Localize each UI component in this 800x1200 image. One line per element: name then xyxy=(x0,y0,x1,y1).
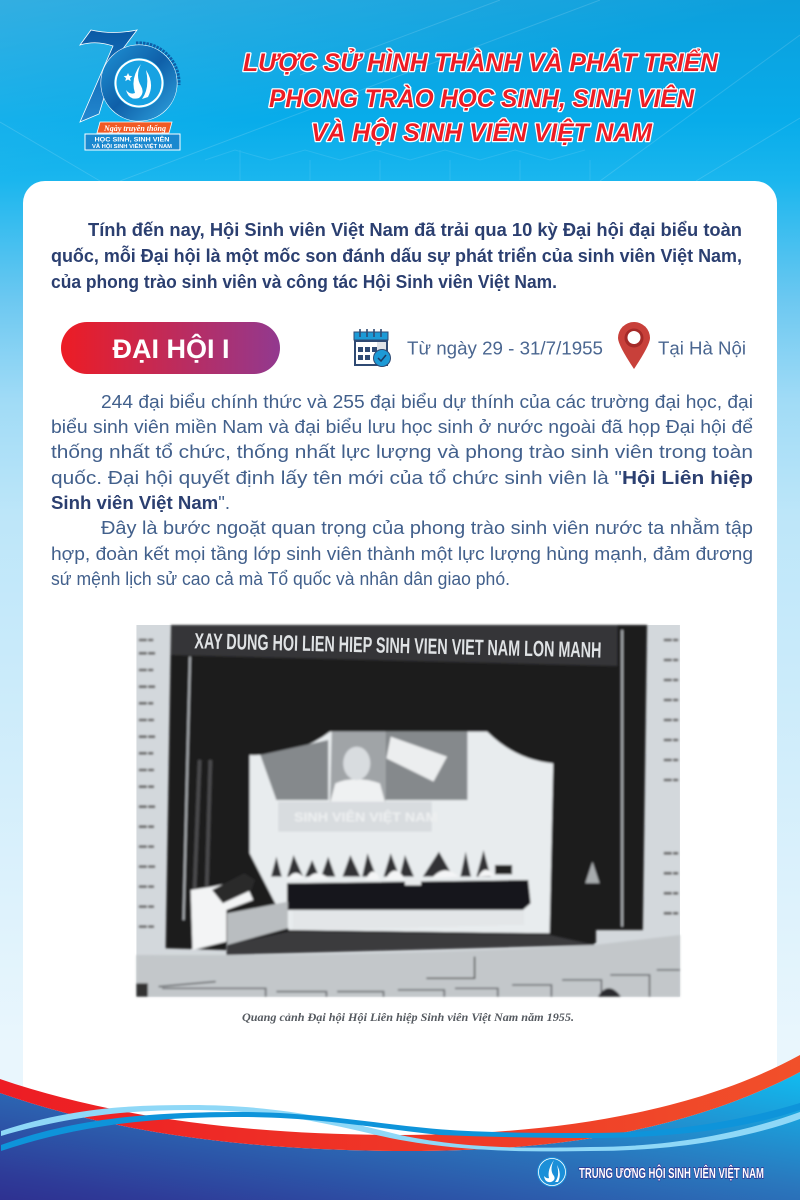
flag card xyxy=(386,737,447,782)
body text xyxy=(51,392,753,589)
logo flame emblem xyxy=(114,58,164,108)
logo: 70 years xyxy=(80,30,180,150)
logo blue ribbon: VÀ HỘI SINH VIÊN VIỆT NAM xyxy=(92,142,172,150)
body text: Đây là bước ngoặt quan trọng của phong trào sinh viên nước ta nhằm tập xyxy=(101,517,753,538)
intro paragraph xyxy=(51,220,742,292)
left side table xyxy=(227,902,288,945)
stage floor xyxy=(226,932,594,955)
stage frame xyxy=(166,625,647,950)
footer waves xyxy=(0,1055,800,1200)
location text: Tại Hà Nội xyxy=(658,338,746,358)
logo blue ribbon xyxy=(85,134,180,150)
logo numeral 7 xyxy=(80,30,137,122)
logo orange ribbon: Ngày truyền thống xyxy=(103,123,167,133)
body text: biểu sinh viên miền Nam và đại biểu lưu học sinh ở nước ngoài đã họp Đại hội để xyxy=(51,417,753,437)
logo blue ribbon: HỌC SINH, SINH VIÊN xyxy=(94,134,170,144)
main table xyxy=(287,880,531,910)
light blue ribbon xyxy=(1,1105,800,1151)
logo date arc xyxy=(136,43,179,85)
body text: thống nhất tổ chức, thống nhất lực lượng và phong trào sinh viên trong toàn xyxy=(51,442,753,462)
intro paragraph: Tính đến nay, Hội Sinh viên Việt Nam đã trải qua 10 kỳ Đại hội đại biểu toàn xyxy=(88,220,742,240)
people row xyxy=(271,850,491,877)
icon: calendar xyxy=(354,329,390,366)
back wall xyxy=(250,732,553,933)
historic photo of the 1955 congress: SINH VIÊN VIỆT NAM xyxy=(294,808,437,825)
title: LƯỢC SỬ HÌNH THÀNH VÀ PHÁT TRIỂN xyxy=(243,47,719,77)
body text: Sinh viên Việt Nam ". xyxy=(51,493,230,513)
lower panels xyxy=(159,970,680,997)
title xyxy=(243,47,719,147)
footer emblem xyxy=(537,1157,567,1187)
side wall stripes xyxy=(139,640,678,927)
body text: quốc. Đại hội quyết định lấy tên mới của tổ chức sinh viên là " Hội Liên hiệp xyxy=(51,468,753,488)
body text: hợp, đoàn kết mọi tầng lớp sinh viên thành một lực lượng hùng mạnh, đảm đương xyxy=(51,544,753,564)
historic photo of the 1955 congress xyxy=(136,625,680,997)
icon: location pin xyxy=(618,322,650,369)
stage front ledge xyxy=(136,935,680,997)
table plinth xyxy=(292,911,525,930)
body text: sứ mệnh lịch sử cao cả mà Tổ quốc và nhân dân giao phó. xyxy=(51,569,510,589)
photo backdrop xyxy=(136,625,680,997)
lectern xyxy=(551,887,596,943)
name card xyxy=(405,879,421,885)
banner xyxy=(171,625,617,666)
title: VÀ HỘI SINH VIÊN VIỆT NAM xyxy=(311,117,653,147)
congress badge: ĐẠI HỘI I xyxy=(112,333,230,364)
banner behind table xyxy=(278,802,432,832)
body text: 244 đại biểu chính thức và 255 đại biểu dự thính của các trường đại học, đại xyxy=(101,392,753,412)
side curtain lines xyxy=(184,630,622,927)
photo caption: Quang cảnh Đại hội Hội Liên hiệp Sinh viên Việt Nam năm 1955. xyxy=(242,1012,574,1024)
intro paragraph: quốc, mỗi Đại hội là một mốc son đánh dấu sự phát triển của sinh viên Việt Nam, xyxy=(51,245,742,266)
portrait xyxy=(330,732,385,803)
date text: Từ ngày 29 - 31/7/1955 xyxy=(407,338,603,358)
blue ribbon xyxy=(1,1103,800,1151)
intro paragraph: của phong trào sinh viên và công tác Hội Sinh viên Việt Nam. xyxy=(51,272,557,292)
red wave xyxy=(0,1055,800,1151)
congress badge xyxy=(61,322,280,374)
backdrop behind portrait xyxy=(260,732,467,800)
footer blue gradient xyxy=(0,1072,800,1200)
title: PHONG TRÀO HỌC SINH, SINH VIÊN xyxy=(269,83,695,113)
logo numeral 0 ring xyxy=(108,52,170,114)
